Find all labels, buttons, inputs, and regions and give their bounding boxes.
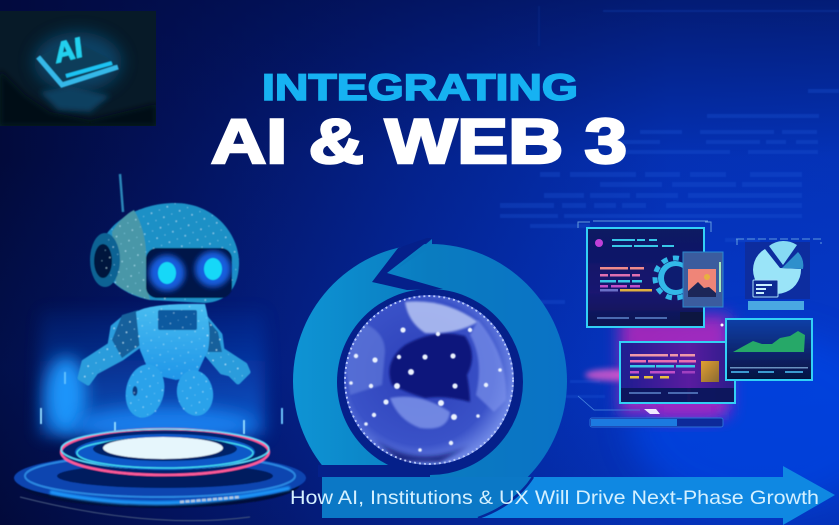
title: INTEGRATING: INTEGRATING xyxy=(262,67,578,108)
image card xyxy=(683,252,723,307)
antenna xyxy=(120,174,123,212)
globe xyxy=(344,295,514,465)
arms xyxy=(80,315,140,383)
panel: area chart xyxy=(726,319,812,380)
globe lights xyxy=(349,327,502,452)
ear xyxy=(90,233,120,287)
head xyxy=(100,203,239,303)
AI chip xyxy=(38,31,118,86)
torso xyxy=(136,304,209,380)
robot xyxy=(80,174,248,421)
arrow head gap xyxy=(372,238,443,290)
panel: code window top xyxy=(587,228,704,327)
visor xyxy=(146,248,232,298)
hologram glow xyxy=(40,310,283,443)
label card xyxy=(753,280,778,297)
title: AI & WEB 3: AI & WEB 3 xyxy=(211,107,627,177)
point cloud dots xyxy=(80,203,248,418)
background code lines xyxy=(500,6,839,398)
cycle arrow ring xyxy=(285,238,567,525)
holographic platform xyxy=(14,429,306,521)
glowing disc xyxy=(103,437,223,459)
dashboard illustration xyxy=(578,221,821,427)
globe ocean xyxy=(389,333,472,402)
pink glow xyxy=(578,221,730,420)
subtitle arrow band xyxy=(322,466,835,525)
icon: gear xyxy=(655,258,695,298)
subtitle text: How AI, Institutions & UX Will Drive Next-Phase Growth xyxy=(290,487,819,509)
progress bar xyxy=(578,396,723,427)
panel: code window bottom xyxy=(620,342,735,403)
pie xyxy=(753,249,801,294)
AI chip photo xyxy=(0,11,156,126)
eyes xyxy=(149,251,231,291)
globe land xyxy=(405,301,478,333)
legs xyxy=(121,361,169,421)
panel: pie chart xyxy=(736,239,821,310)
AI chip: AI xyxy=(53,31,84,69)
dark ring behind globe xyxy=(337,289,523,475)
platform rings xyxy=(61,429,269,475)
platform base xyxy=(14,453,306,521)
